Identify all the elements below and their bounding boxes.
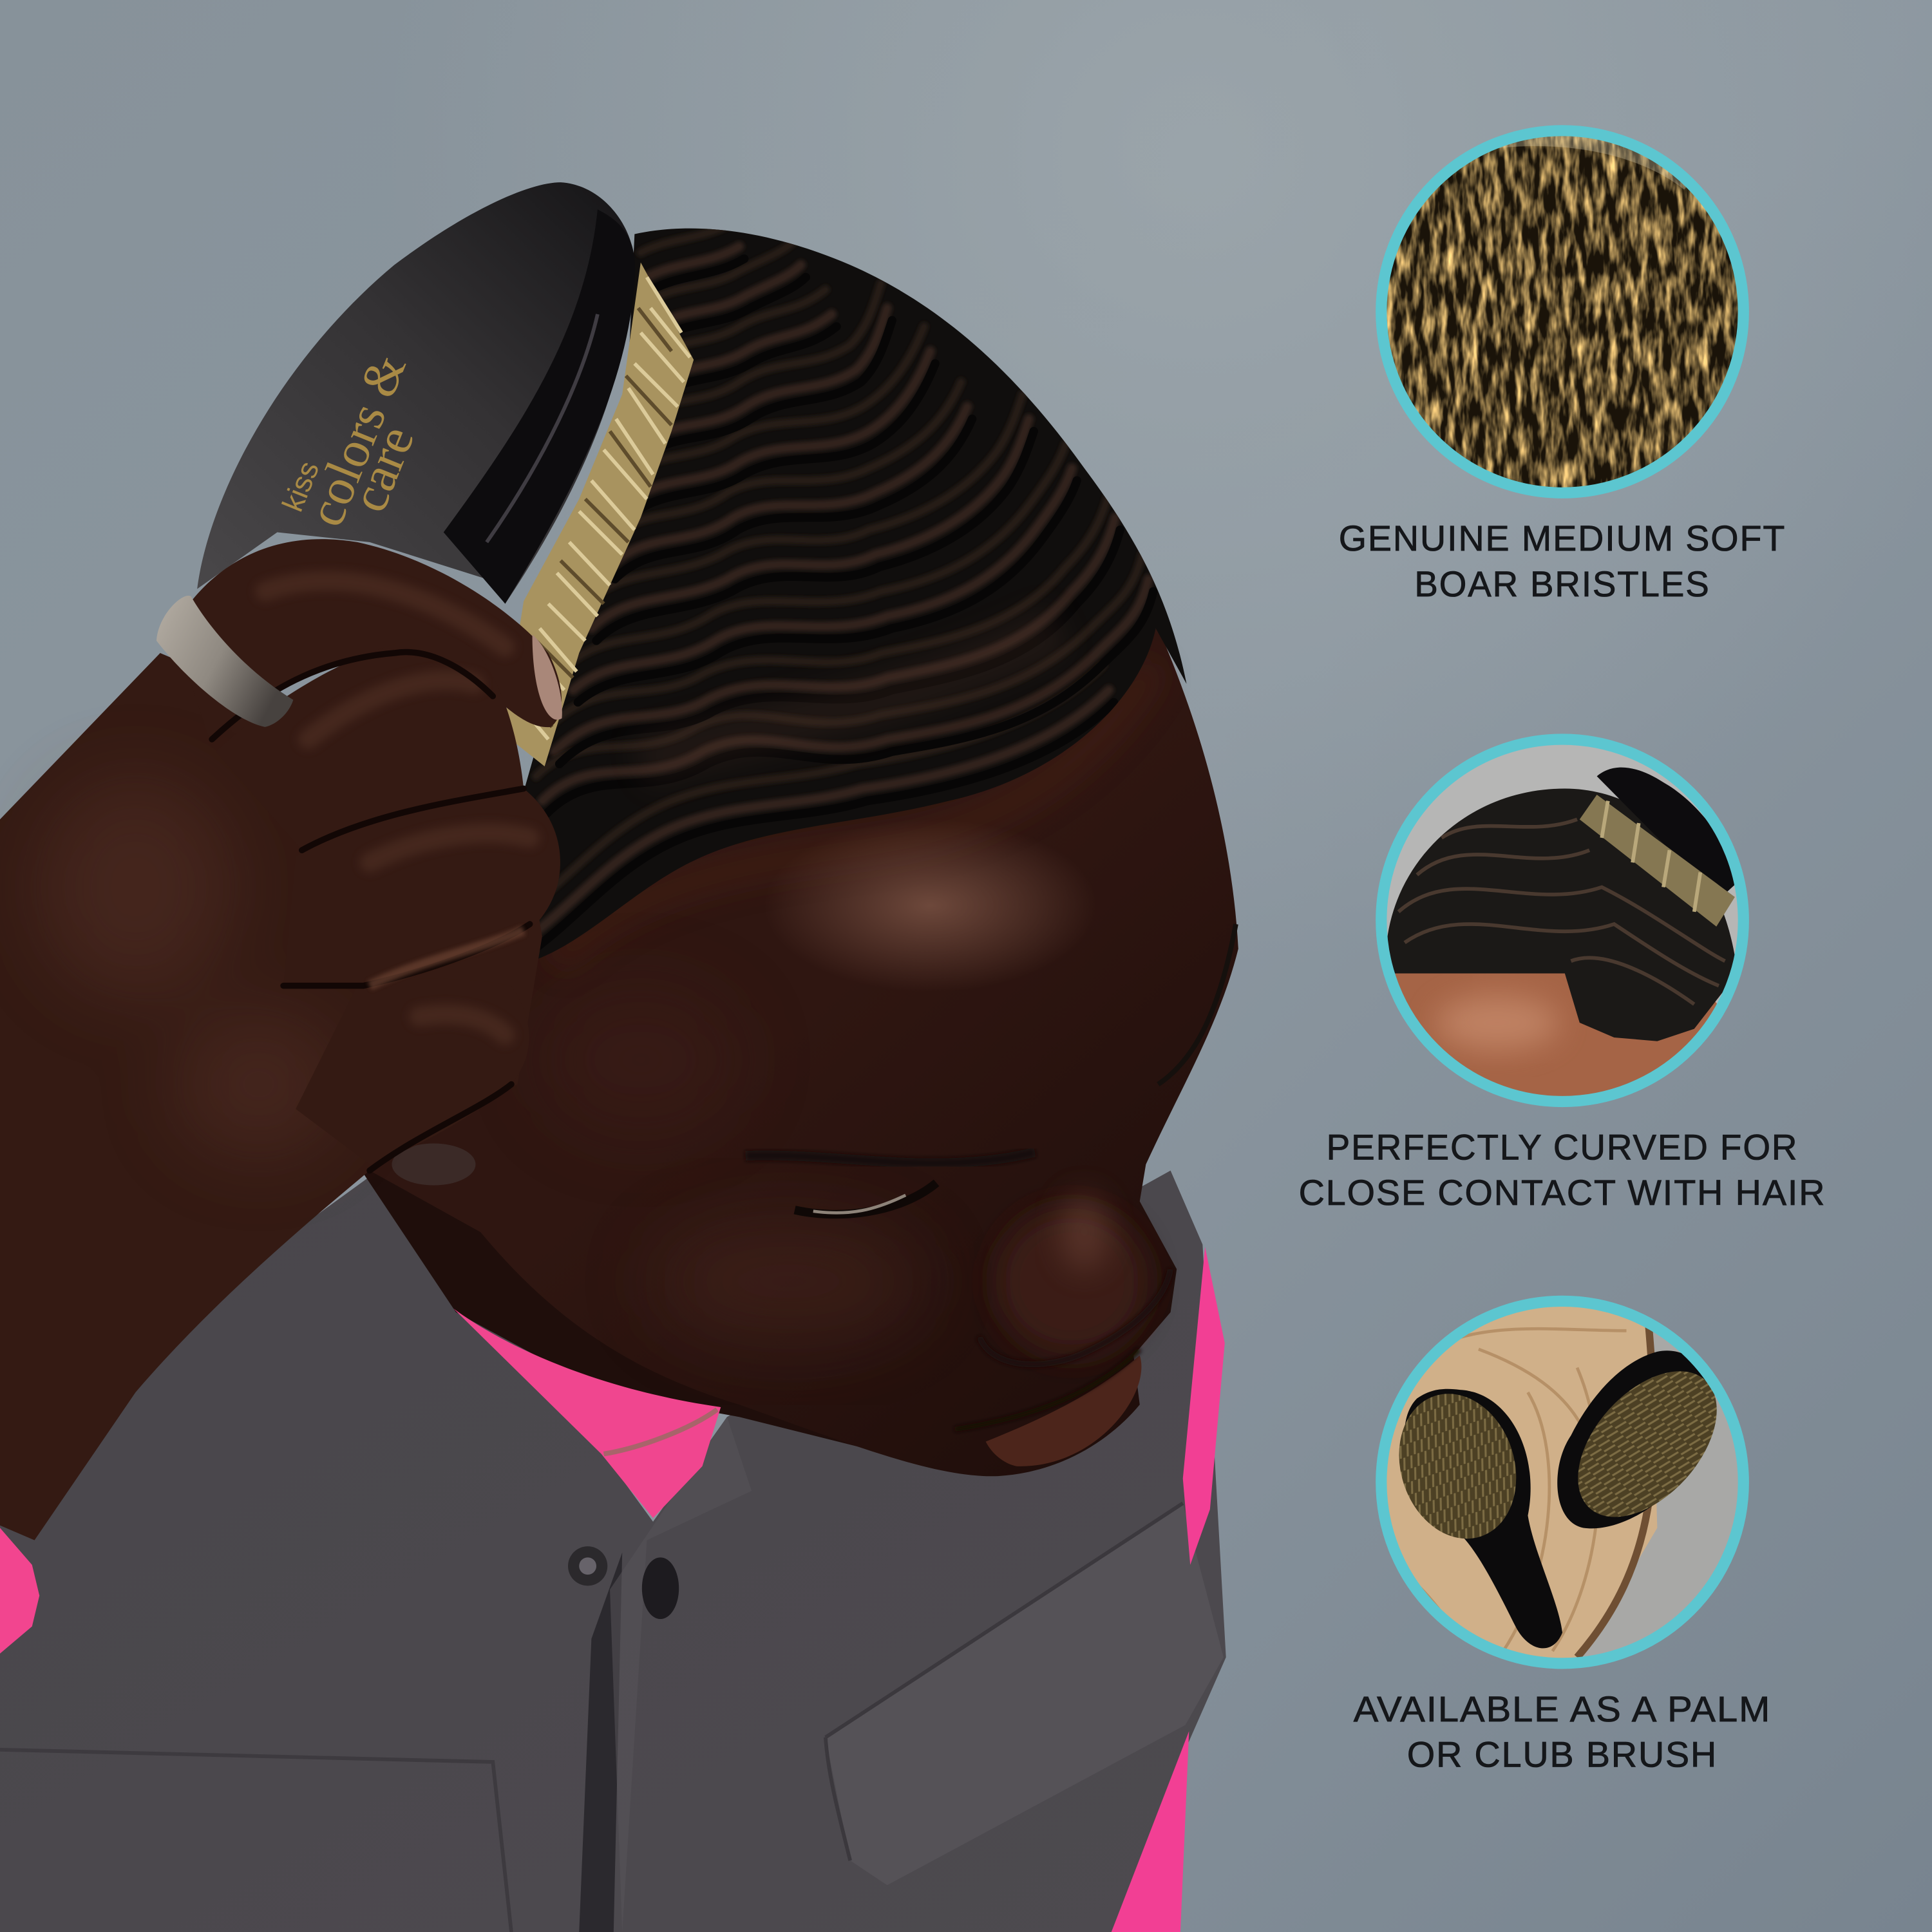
- nose: [980, 1193, 1171, 1364]
- brush glossy side: [444, 209, 635, 603]
- brush logo: kiss: [276, 457, 325, 516]
- lips: [955, 1349, 1141, 1466]
- finger separations: [212, 652, 530, 1171]
- jacket: [0, 1171, 1226, 1932]
- feature: bristles: BOAR BRISTLES: [1414, 564, 1710, 604]
- caption: AVAILABLE AS A PALM: [1354, 1689, 1771, 1729]
- finger: ring: [283, 788, 560, 986]
- feature: curved: CLOSE CONTACT WITH HAIR: [1299, 1173, 1826, 1213]
- jacket snap buttons: [568, 1546, 679, 1619]
- feature: bristles: [1339, 129, 1786, 604]
- finger: little: [296, 979, 529, 1164]
- hand: [0, 539, 562, 1540]
- brush body: [197, 182, 634, 604]
- back of hand: [0, 653, 542, 1540]
- brush: [197, 182, 694, 766]
- finger highlights: [265, 581, 530, 1035]
- forehead highlight: [764, 819, 1097, 992]
- fingernail: [533, 634, 562, 720]
- feature: curved: [1299, 739, 1826, 1213]
- temple shading: [542, 986, 739, 1133]
- feature: palm or club: OR CLUB BRUSH: [1407, 1735, 1718, 1775]
- circle photo: bristles: [1380, 129, 1745, 494]
- caption: PERFECTLY CURVED FOR: [1327, 1127, 1798, 1167]
- caption: GENUINE MEDIUM SOFT: [1339, 518, 1786, 558]
- creased lit knuckle: [370, 931, 524, 986]
- finger: index: [173, 539, 562, 739]
- pink shirt and panels: [0, 1247, 1225, 1932]
- brush logo: [275, 337, 449, 547]
- eye and brow: [746, 924, 1236, 1215]
- finger: middle: [216, 634, 524, 850]
- hair: [518, 222, 1186, 963]
- hairline warm shade: [554, 665, 1152, 961]
- head and face: [370, 629, 1238, 1476]
- circle photo: two brushes on wood: [1380, 1300, 1745, 1665]
- circle photo: hair and brush: [1380, 739, 1750, 1109]
- ring: [156, 596, 293, 727]
- club brush: [1399, 1388, 1562, 1649]
- feature: palm or club: [1354, 1300, 1771, 1775]
- hand highlights: [37, 776, 345, 1158]
- brush logo: colors &: [297, 346, 417, 534]
- palm brush: [1551, 1345, 1743, 1543]
- cheek shading: [653, 1220, 924, 1343]
- neck: [357, 1109, 887, 1454]
- ear lobe: [392, 1144, 476, 1186]
- brush bristles: [503, 263, 694, 766]
- brush logo: care: [340, 418, 425, 520]
